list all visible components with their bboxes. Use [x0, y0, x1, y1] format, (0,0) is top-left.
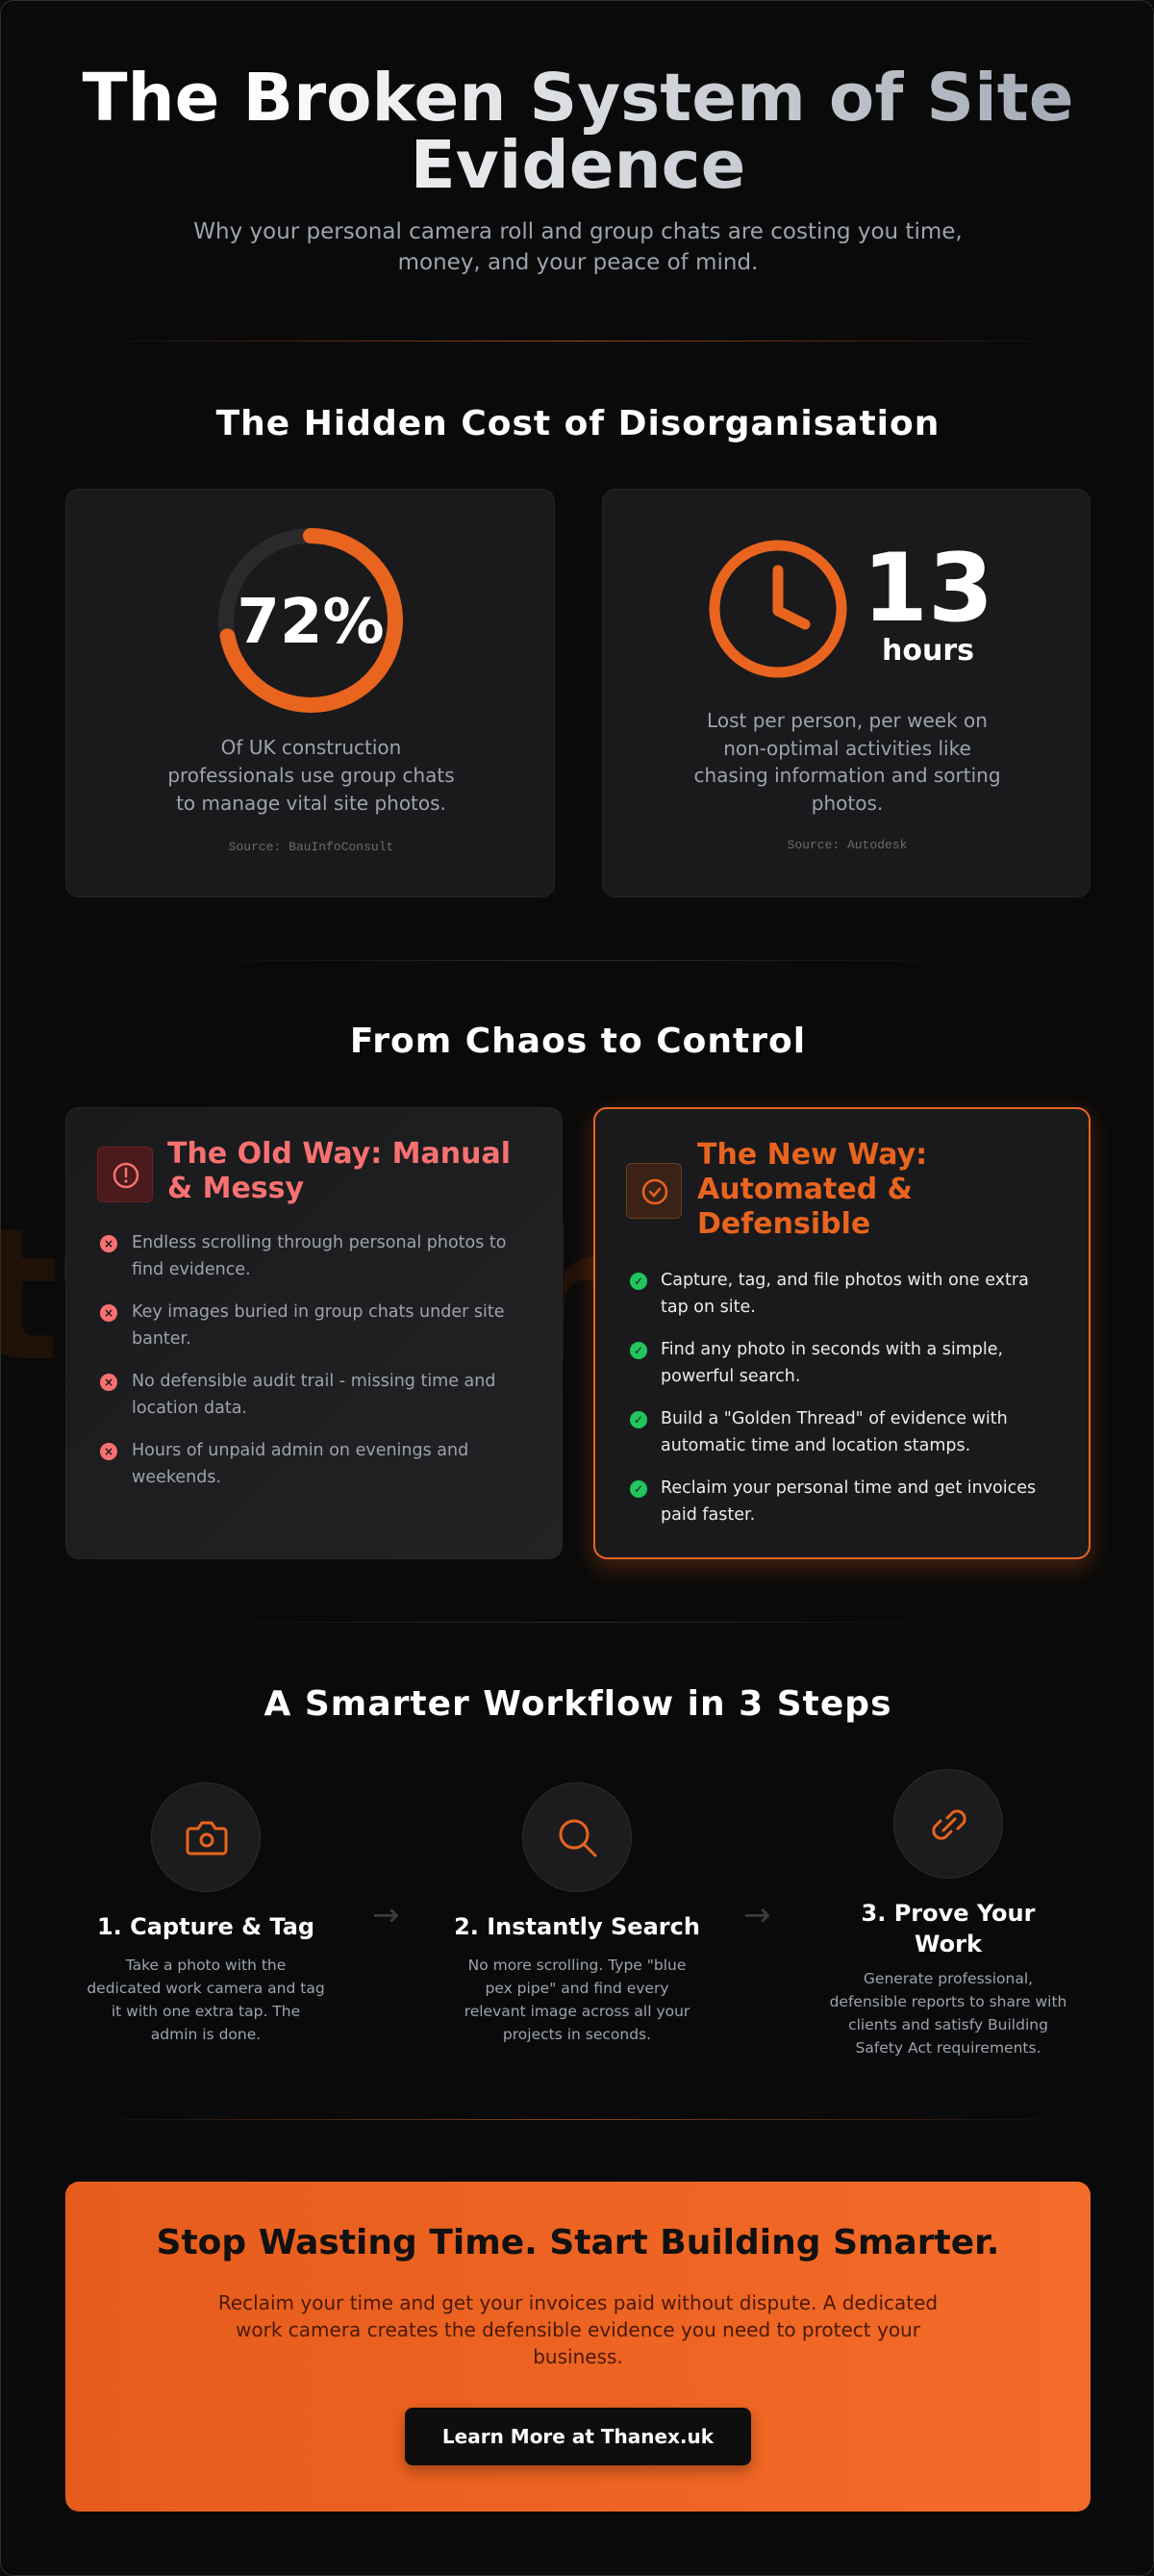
list: old way problems: Key images buried in group chats under site banter. — [132, 1302, 504, 1349]
heading: workflow: A Smarter Workflow in 3 Steps — [263, 1684, 892, 1724]
title — [1, 64, 1154, 199]
CTA text: Reclaim your time and get your invoices paid without dispute. A dedicated work camera creates the defensible evidence you need to protect your business. — [218, 2291, 938, 2368]
step 3: 3. Prove Your — [862, 1900, 1035, 1927]
icon: clock — [710, 541, 846, 677]
list: new way benefits: Build a "Golden Thread" of evidence with automatic time and location stamps. — [661, 1409, 1008, 1455]
subtitle: Why your personal camera roll and group chats are costing you time, money, and your peace of mind. — [193, 219, 963, 275]
list: old way problems: × — [104, 1376, 113, 1389]
step 1: admin is done. — [151, 2026, 261, 2043]
list: old way problems: × — [104, 1306, 113, 1320]
list: new way benefits: Find any photo in seconds with a simple, powerful search. — [661, 1340, 1003, 1386]
donut chart — [218, 528, 403, 713]
step 1: dedicated work camera and tag — [87, 1980, 325, 1997]
list: old way problems: No defensible audit trail - missing time and location data. — [132, 1372, 495, 1418]
list: new way benefits: ✓ — [634, 1344, 643, 1357]
step 1: Take a photo with the — [126, 1957, 286, 1974]
step 3: Work — [915, 1931, 982, 1957]
card: 13 hours stat — [602, 489, 1091, 897]
step 3: Generate professional, defensible reports to share with clients and satisfy Building Safety Act requirements. — [830, 1970, 1066, 2057]
step 1: 1. Capture & Tag — [97, 1913, 314, 1940]
CTA panel — [65, 2182, 1091, 2512]
source: Source: Autodesk — [788, 838, 907, 852]
number 13 hours: 13 — [863, 534, 993, 644]
icon: link — [893, 1769, 1003, 1879]
icon: search — [522, 1782, 632, 1892]
panel: old way — [65, 1107, 563, 1559]
list: old way problems: × — [104, 1445, 113, 1458]
button: Learn More at Thanex.uk — [442, 2425, 714, 2448]
step 2 — [454, 1782, 700, 2043]
icon: camera — [151, 1782, 261, 1892]
old way heading: The Old Way: Manual & Messy — [167, 1137, 511, 1205]
step 3 — [830, 1769, 1066, 2057]
heading: hidden cost: The Hidden Cost of Disorganisation — [216, 404, 940, 443]
icon: check — [626, 1163, 682, 1219]
source: Source: BauInfoConsult — [229, 840, 393, 854]
arrow 2: → — [743, 1896, 771, 1934]
list: new way benefits: Reclaim your personal time and get invoices paid faster. — [661, 1478, 1036, 1525]
list: new way benefits: ✓ — [634, 1413, 643, 1427]
card: 72% stat — [65, 489, 555, 897]
step 1: it with one extra tap. The — [112, 2003, 300, 2020]
button — [405, 2408, 751, 2465]
heading: chaos to control: From Chaos to Control — [350, 1022, 806, 1061]
title: Evidence — [411, 127, 745, 204]
list: new way benefits — [630, 1271, 1036, 1525]
donut chart: 72% — [237, 587, 385, 658]
CTA heading: Stop Wasting Time. Start Building Smarter. — [157, 2223, 999, 2262]
list: old way problems: Endless scrolling through personal photos to find evidence. — [132, 1233, 506, 1279]
step 2: No more scrolling. Type "blue pex pipe" and find every relevant image across all your projects in seconds. — [464, 1957, 690, 2043]
list: old way problems: Hours of unpaid admin on evenings and weekends. — [132, 1441, 468, 1487]
arrow 1: → — [372, 1896, 400, 1934]
new way heading: The New Way: Automated & Defensible — [697, 1138, 927, 1241]
title: The Broken System of Site — [82, 60, 1074, 137]
icon: alert — [97, 1147, 153, 1202]
list: old way problems: × — [104, 1237, 113, 1250]
list: new way benefits: ✓ — [634, 1275, 643, 1288]
list: new way benefits: ✓ — [634, 1482, 643, 1496]
step 1 — [87, 1782, 325, 2043]
list: old way problems — [100, 1233, 506, 1487]
step 2: 2. Instantly Search — [454, 1913, 700, 1940]
stat description: Lost per person, per week on non‑optimal activities like chasing information and sorting photos. — [693, 709, 1001, 814]
number 13 hours: hours — [882, 634, 974, 668]
list: new way benefits: Capture, tag, and file photos with one extra tap on site. — [661, 1271, 1029, 1317]
stat description: Of UK construction professionals use group chats to manage vital site photos. — [167, 736, 455, 815]
panel: new way — [593, 1107, 1091, 1559]
